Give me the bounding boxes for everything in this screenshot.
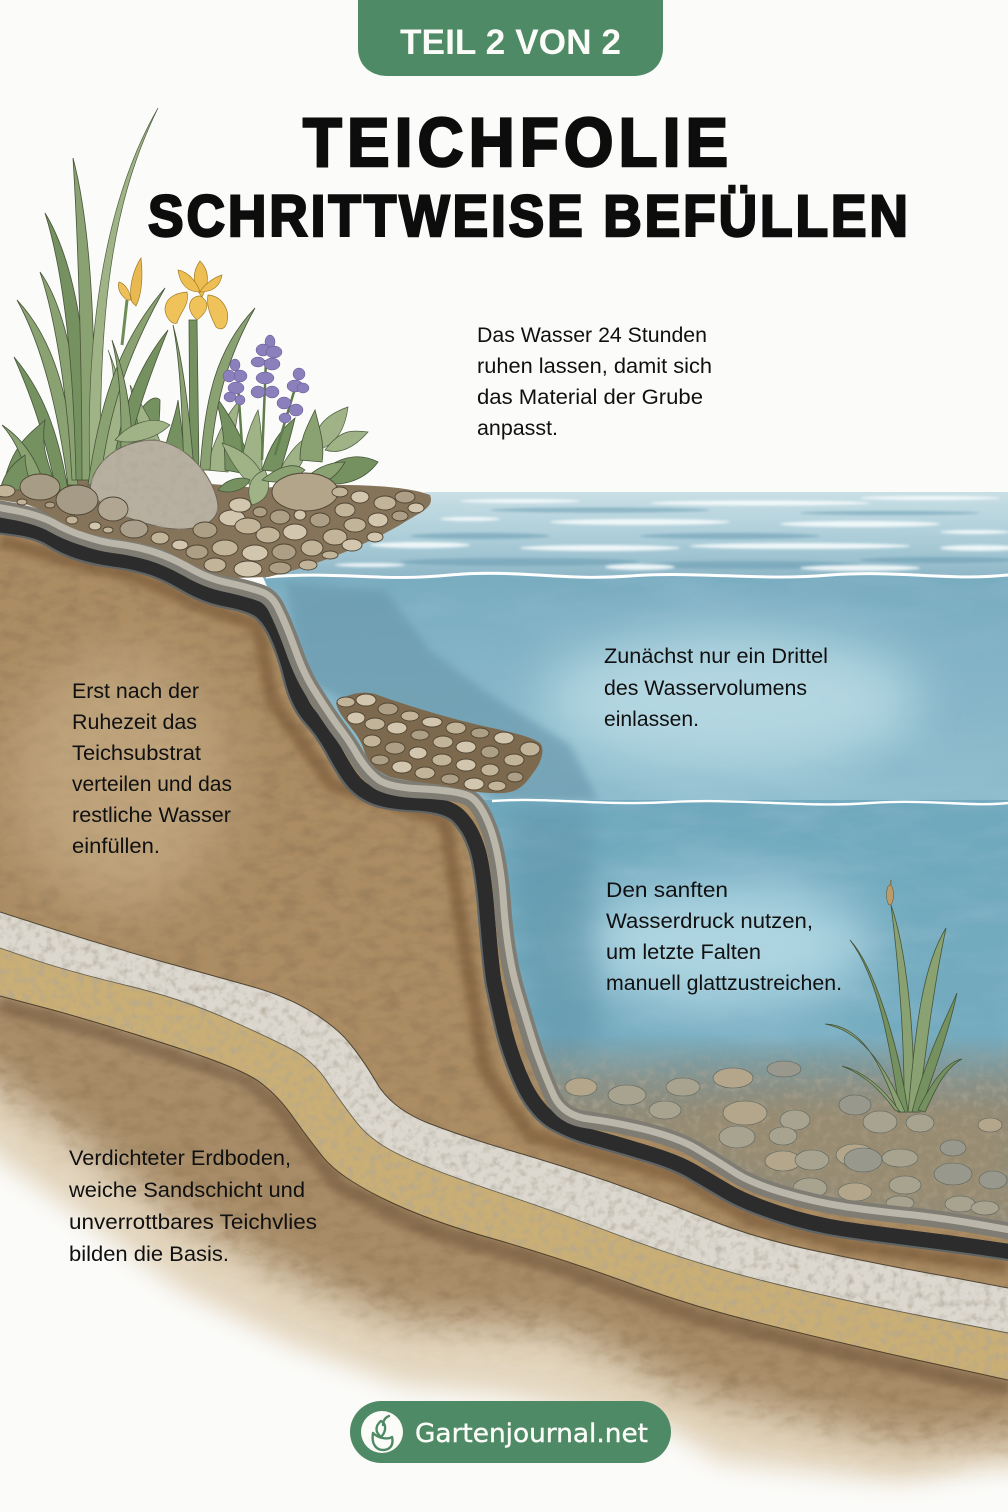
plant: purple lavender <box>223 335 309 460</box>
plant: background foliage <box>100 350 315 475</box>
white fleece layer <box>0 912 1008 1333</box>
compacted soil layer <box>0 509 1008 1288</box>
pond bed <box>525 1030 1008 1240</box>
icon: plant in pot <box>361 1411 403 1453</box>
text: substrate: einfüllen. <box>72 834 160 858</box>
text: substrate: Teichsubstrat <box>72 741 201 765</box>
lower soil layer <box>0 960 1008 1482</box>
text: resting period: das Material der Grube <box>477 385 703 409</box>
grey liner light band <box>0 507 1008 1231</box>
banner: part label: TEIL 2 VON 2 <box>400 23 621 62</box>
text: base layers: bilden die Basis. <box>69 1242 229 1266</box>
text: substrate: Ruhezeit das <box>72 710 197 734</box>
text: base layers <box>68 1146 317 1266</box>
text: water pressure: Den sanften <box>606 878 728 902</box>
fleece lower outline <box>0 948 1008 1333</box>
dark soil band beneath the sand <box>0 1005 1008 1389</box>
water: deep zone left shading <box>505 810 600 1085</box>
sand layer <box>0 948 1008 1380</box>
shelf gravel pile <box>336 693 542 793</box>
text: water pressure <box>606 878 842 995</box>
text: resting period: anpasst. <box>477 416 558 440</box>
pond bed pebbles <box>565 1061 1007 1215</box>
planted bank with gravel <box>0 108 431 578</box>
footer badge: Gartenjournal.net <box>415 1419 648 1449</box>
text: water pressure: Wasserdruck nutzen, <box>606 909 813 933</box>
water: one third filled zone <box>262 575 1008 806</box>
text: resting period: ruhen lassen, damit sich <box>477 354 712 378</box>
small stones <box>0 473 338 538</box>
pale soil fade <box>0 960 1008 1482</box>
soil light patch <box>10 650 230 910</box>
fleece upper outline <box>0 912 1008 1288</box>
footer badge <box>350 1401 671 1463</box>
text: resting period: Das Wasser 24 Stunden <box>477 323 707 347</box>
water: submerged slope shading <box>285 582 598 800</box>
text: resting period <box>477 323 712 440</box>
title: SCHRITTWEISE BEFÜLLEN <box>148 184 908 248</box>
large boulder <box>90 440 218 529</box>
text: water pressure: manuell glattzustreichen. <box>606 971 842 995</box>
shelf pebbles <box>337 694 540 791</box>
soil dark edge under liner <box>0 540 1008 1267</box>
plant: yellow iris bud <box>118 258 142 345</box>
bank pebbles <box>17 487 424 577</box>
text: water pressure: um letzte Falten <box>606 940 761 964</box>
text: base layers: unverrottbares Teichvlies <box>69 1210 317 1234</box>
pond liner <box>0 507 1008 1253</box>
text: substrate: restliche Wasser <box>72 803 231 827</box>
sand lower outline <box>0 996 1008 1380</box>
text: first third of water: einlassen. <box>604 707 699 731</box>
text: base layers: weiche Sandschicht und <box>68 1178 305 1202</box>
text: first third of water <box>604 644 828 731</box>
banner: part label <box>358 0 663 76</box>
water line: lower level <box>492 800 1008 804</box>
water line: upper level <box>266 573 1008 577</box>
text: substrate: verteilen und das <box>72 772 232 796</box>
pond plant <box>825 880 962 1112</box>
plant: tall reed blades <box>14 108 168 490</box>
plant: yellow iris flower <box>165 261 255 470</box>
title: TEICHFOLIE <box>303 105 728 182</box>
text: substrate <box>72 679 232 858</box>
plant: leafy ground cover <box>0 407 378 505</box>
text: first third of water: Zunächst nur ein Drittel <box>604 644 828 668</box>
grey protective layer <box>0 508 1008 1232</box>
water: deep zone <box>478 800 1008 1240</box>
solid soil <box>0 960 1008 1440</box>
water: mid zone light glow <box>540 630 920 770</box>
text: substrate: Erst nach der <box>72 679 199 703</box>
water: calm surface <box>262 492 1008 578</box>
black liner edge <box>0 525 1008 1253</box>
text: base layers: Verdichteter Erdboden, <box>69 1146 291 1170</box>
water: deep zone light glow <box>575 880 875 1010</box>
title <box>148 105 908 248</box>
black liner <box>0 524 1008 1252</box>
text: first third of water: des Wasservolumens <box>604 676 807 700</box>
